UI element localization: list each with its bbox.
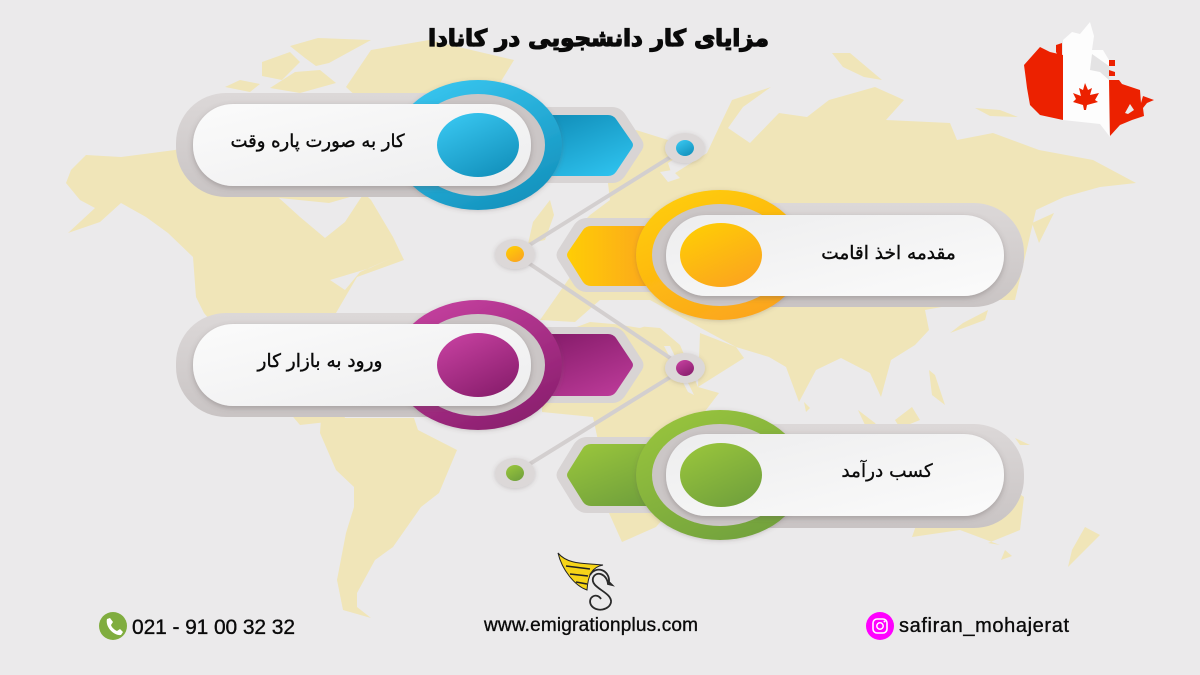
label: مقدمه اخذ اقامت	[821, 243, 956, 264]
node: yellow	[495, 239, 535, 269]
node: blue	[665, 133, 705, 163]
white label pill	[193, 324, 531, 406]
outer pill	[644, 203, 1024, 307]
label: ورود به بازار کار	[257, 351, 382, 372]
node: magenta	[665, 353, 705, 383]
white label pill	[666, 434, 1004, 516]
yellow disc	[680, 223, 762, 287]
white label pill	[666, 215, 1004, 296]
title: مزایای کار دانشجویی در کانادا	[428, 26, 769, 52]
yellow ring	[636, 190, 804, 320]
phone contact	[99, 612, 295, 640]
magenta ring	[394, 300, 562, 430]
arrow: yellow hexagon	[556, 218, 680, 292]
icon: canada flag map	[1024, 22, 1154, 137]
inner grey ring	[411, 314, 545, 416]
label: کسب درآمد	[841, 459, 933, 482]
connector lines	[515, 148, 685, 473]
outer pill	[176, 313, 556, 417]
inner grey ring	[652, 424, 788, 526]
outer pill	[176, 93, 556, 197]
logo: winged S	[558, 553, 612, 610]
icon: instagram	[866, 612, 894, 640]
outer pill	[644, 424, 1024, 528]
green ring	[636, 410, 804, 540]
panel: part-time work	[176, 80, 644, 210]
phone number: 021 - 91 00 32 32	[132, 616, 295, 639]
inner grey ring	[652, 204, 788, 306]
green disc	[680, 443, 762, 507]
arrow: blue hexagon	[520, 107, 644, 183]
inner grey ring	[411, 94, 545, 196]
instagram handle: safiran_mohajerat	[899, 615, 1069, 637]
instagram contact	[866, 612, 1069, 640]
panel: residency	[556, 190, 1024, 320]
arrow: magenta hexagon	[520, 327, 644, 403]
panel: income	[556, 410, 1024, 540]
magenta disc	[437, 333, 519, 397]
label: کار به صورت پاره وقت	[230, 131, 405, 152]
icon: phone	[99, 612, 127, 640]
node: green	[495, 458, 535, 488]
website: www.emigrationplus.com	[483, 615, 698, 636]
arrow: green hexagon	[556, 437, 680, 513]
blue ring	[394, 80, 562, 210]
world map	[66, 38, 1136, 618]
map water details	[279, 170, 694, 395]
panel: job market	[176, 300, 644, 430]
white label pill	[193, 104, 531, 186]
blue disc	[437, 113, 519, 177]
